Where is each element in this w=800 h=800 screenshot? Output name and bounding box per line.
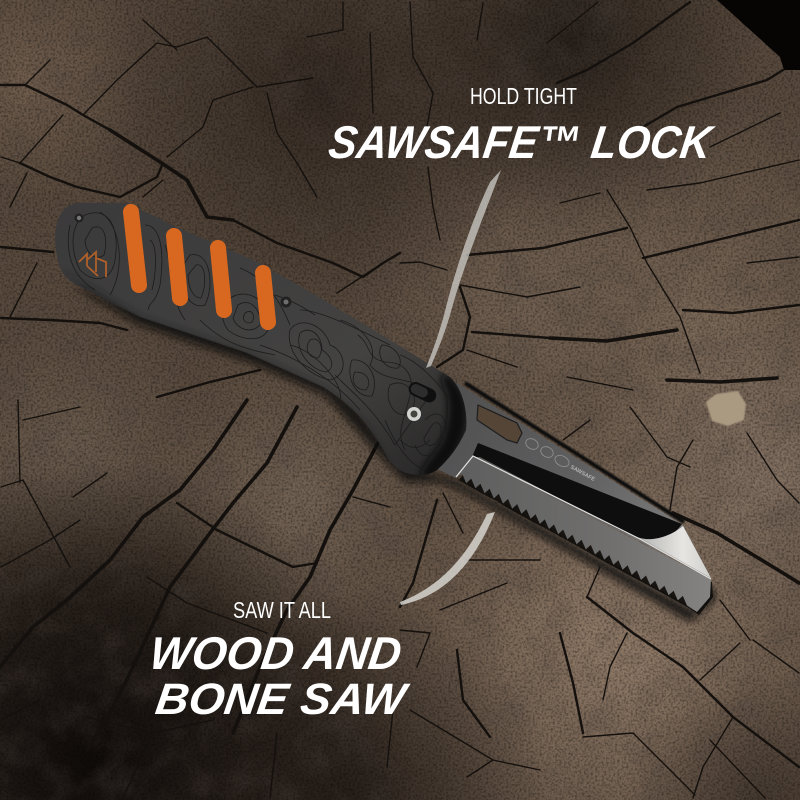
kicker: hold tight: HOLD TIGHT [470, 83, 577, 109]
sawsafe lock slider [406, 380, 439, 405]
leader line: saw [400, 512, 495, 605]
knife shadow [70, 285, 716, 622]
heading line 2: BONE SAW [153, 675, 412, 724]
bevel highlight line [456, 456, 711, 579]
handle logo [79, 252, 106, 277]
major cracks [0, 130, 799, 750]
polished tip [640, 526, 711, 578]
SAWSAFE etching: SAWSAFE [569, 465, 596, 483]
dark corner beyond the stump [717, 0, 800, 70]
callout: wood and bone saw [147, 597, 412, 724]
heading: sawsafe lock: SAWSAFE™ LOCK [326, 116, 718, 168]
orange grip stripes [131, 212, 268, 322]
leader line: lock [426, 170, 501, 368]
kicker: saw it all: SAW IT ALL [233, 597, 331, 623]
black fuller [472, 443, 682, 540]
topographic contour pattern [68, 212, 450, 470]
wood chip on stump [706, 391, 746, 426]
spine shadow [465, 383, 684, 522]
serrated saw edge [456, 456, 711, 612]
pivot screw [407, 407, 421, 421]
screw middle [280, 296, 292, 308]
knife [55, 203, 716, 622]
blade [435, 380, 713, 615]
callout: sawsafe lock [326, 83, 718, 168]
blade body [435, 380, 711, 578]
pivot end shading [60, 270, 467, 480]
saw tooth shadow [459, 459, 713, 615]
handle [55, 203, 467, 480]
screw top [74, 214, 84, 222]
heading line 1: WOOD AND [147, 627, 405, 679]
blade markings [524, 437, 571, 469]
blade cutout [477, 405, 522, 443]
